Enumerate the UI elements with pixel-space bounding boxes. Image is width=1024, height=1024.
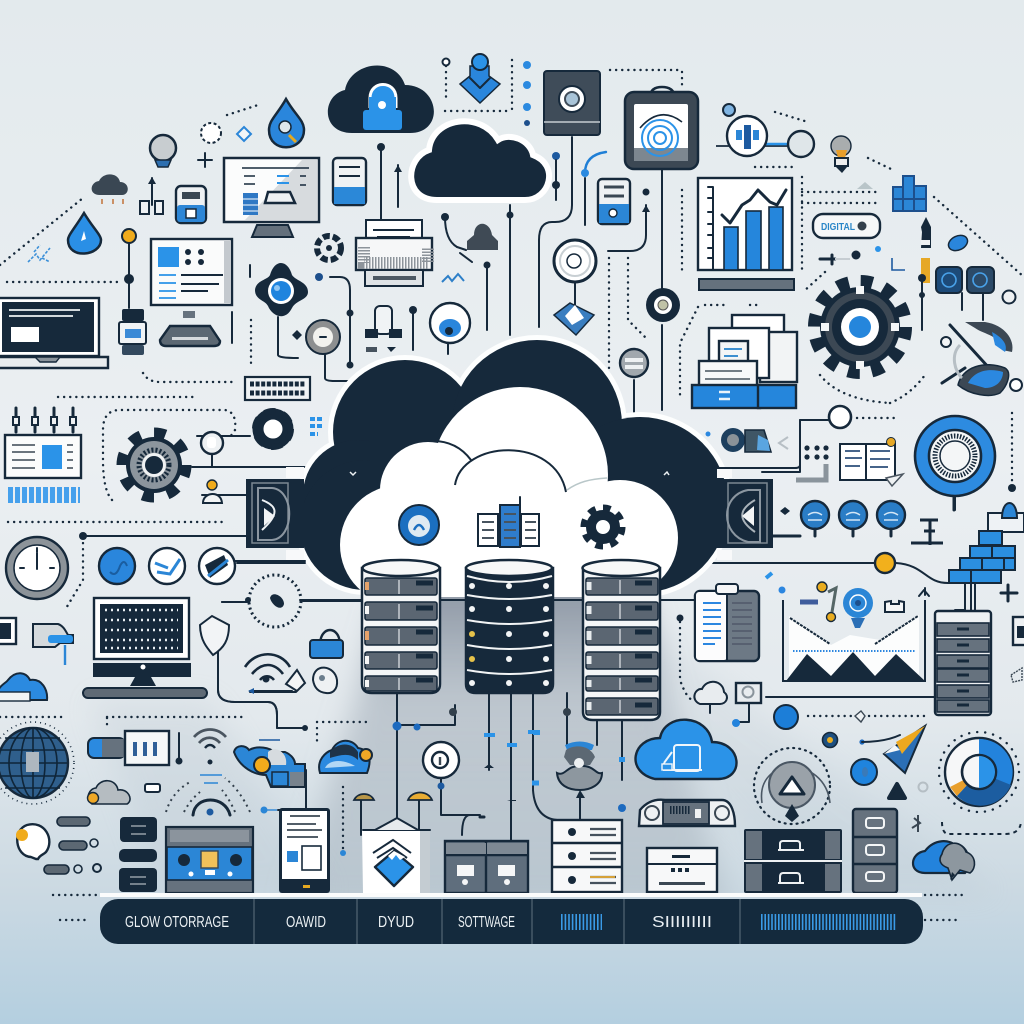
icon: globe	[0, 722, 74, 804]
icon: fingerprint clipboard	[625, 87, 698, 169]
icon: apple circle	[430, 303, 470, 354]
dark outer cloud	[300, 340, 728, 593]
icon: small buildings	[893, 176, 926, 211]
white inner cloud	[340, 387, 678, 605]
icon: cloud lock 2	[441, 212, 514, 282]
icon: gear with ring	[122, 433, 186, 497]
icon: blue device	[176, 186, 206, 223]
icon: thermometer pin	[918, 217, 931, 330]
node connector	[315, 273, 354, 368]
icon: open book	[796, 438, 903, 486]
icon: dark cloud	[411, 121, 549, 200]
icon: bluetooth mark	[912, 815, 920, 832]
chart: mountain area	[766, 573, 929, 681]
icon: blue brick steps	[949, 503, 1024, 583]
icon: small server box	[333, 158, 366, 205]
icon: blue machine	[166, 827, 253, 893]
icon: document book	[695, 584, 759, 661]
icon: pill circle	[620, 349, 648, 377]
icon: white rack	[647, 848, 717, 892]
icon: dotted route	[676, 614, 692, 700]
icon: wifi 2	[194, 730, 226, 764]
icon: storm cloud	[913, 841, 975, 880]
icon: warning triangle	[889, 782, 928, 798]
server stack: middle	[466, 560, 553, 693]
icon: tools circle	[199, 548, 305, 584]
icon: target arcs	[754, 748, 830, 824]
icon: desktop grid monitor	[83, 598, 207, 698]
icon: tape machine	[639, 800, 735, 826]
icon: white server unit	[552, 820, 622, 892]
dashed bracket	[942, 822, 1021, 834]
icon: gear	[584, 508, 622, 546]
dotted panel route	[103, 410, 235, 500]
icon: router panel	[5, 408, 81, 495]
main cloud	[295, 335, 733, 605]
icon: blue circle	[851, 759, 877, 785]
icon: small rain cloud	[92, 174, 128, 204]
icon: paper plane	[859, 726, 925, 773]
node: yellow junction	[875, 553, 895, 573]
icon: tap device	[33, 624, 73, 665]
icon: square camera	[732, 683, 761, 727]
node	[79, 532, 87, 540]
label: cloud: OAWID	[286, 914, 326, 931]
icon: satellite dish	[941, 322, 1022, 395]
icon: buildings	[478, 497, 539, 547]
icon: light bulb	[150, 135, 176, 167]
icon: eye cloud	[255, 263, 308, 316]
icon: cloud with lock	[328, 66, 434, 133]
icon: cloud outline small	[694, 682, 727, 713]
icon: large gear	[815, 282, 905, 372]
icon: USB stick	[88, 731, 182, 765]
small ring	[1002, 290, 1016, 304]
icon: gear ring	[317, 236, 341, 260]
icon: wifi	[245, 654, 305, 694]
tick bars 1	[561, 914, 602, 930]
icon: small server 2	[598, 179, 630, 224]
icon: building blocks with arrow	[140, 177, 163, 214]
icon: left small box	[0, 618, 16, 644]
icon: blue location shield	[460, 54, 500, 103]
icon: chat bubble	[16, 824, 49, 859]
connector pair	[965, 583, 975, 611]
icon: shield	[200, 616, 308, 731]
icon: network sketch	[28, 245, 50, 262]
chart: bars	[698, 178, 794, 290]
label: tick text: SIIIIIIIII	[652, 914, 712, 931]
icon: printer	[356, 220, 432, 286]
icon: cloud small with sun	[88, 781, 160, 804]
icon: diamond	[237, 127, 251, 141]
icon: keyhole circle	[423, 742, 459, 790]
icon: padlock blue	[310, 630, 343, 658]
icon: dotted dial	[222, 575, 362, 627]
icon: ear shape	[313, 668, 337, 693]
tick bars 2	[761, 914, 896, 930]
icon: filing cabinet	[853, 809, 897, 893]
icon: small cog node	[713, 406, 851, 468]
icon: web panel	[151, 239, 232, 318]
icon: infinity circle	[99, 548, 135, 584]
icon: lens dog figure	[557, 742, 602, 798]
icon: binocular camera	[706, 428, 788, 452]
icon: water drop	[269, 99, 304, 147]
label: dyud: DYUD	[378, 914, 414, 931]
icon: camera box	[544, 71, 600, 135]
server stack: left	[362, 560, 440, 693]
icon: check circle	[149, 548, 185, 584]
icon: user	[203, 480, 222, 503]
icon: dark rounded tiles	[119, 817, 157, 892]
icon: sparkle	[198, 153, 212, 167]
icon: watch device	[119, 309, 146, 355]
icon: cloud with orange dot	[319, 741, 372, 773]
icon: digital pill	[813, 214, 880, 238]
icon: keyboard	[245, 377, 310, 400]
bottom label bar	[100, 899, 923, 944]
icon: shield card	[362, 818, 430, 893]
node: yellow pin	[122, 229, 136, 284]
icon: mini gauges circle	[554, 240, 596, 305]
plus sign	[1001, 585, 1017, 601]
icon: folder stack	[692, 315, 797, 408]
icon: digital pill: DIGITAL	[821, 222, 855, 233]
icon: desktop monitor	[224, 158, 319, 237]
icon: tower cabinet	[935, 611, 991, 715]
label: glow storage: GLOW OTORRAGE	[125, 914, 229, 931]
icon: dark gadget	[160, 326, 220, 346]
icon: target	[399, 505, 439, 545]
icon: water drop 2	[68, 213, 101, 254]
icon: right edge small box	[1011, 617, 1024, 682]
icon: light bulb 2	[831, 136, 851, 173]
icon: access person	[365, 306, 417, 352]
icon: cabinet pair	[445, 841, 528, 893]
icon: blue cloud large	[636, 720, 737, 779]
icon: dark drawers	[744, 829, 842, 893]
icon: radar arcs	[166, 775, 277, 816]
small nodes: blue pins	[523, 61, 606, 225]
small controls near gear	[820, 246, 905, 270]
icon: lens circle	[201, 432, 223, 454]
left side connector D block	[246, 467, 304, 560]
right side connector block	[716, 467, 773, 560]
icon: gauge	[6, 537, 68, 599]
icon: pills row	[44, 817, 101, 874]
icon: small yellow node	[822, 732, 838, 748]
label: software: SOTTWAGE	[458, 914, 515, 931]
icon: laptop	[0, 298, 108, 368]
icon: blue dots	[310, 419, 322, 434]
icon: blue node	[774, 705, 925, 729]
small bus nodes	[392, 708, 626, 817]
icon: cloud blocks with orange dot	[234, 740, 306, 803]
icon: knob	[292, 320, 340, 354]
server stack: right	[582, 560, 660, 720]
icon: black gear	[255, 411, 291, 447]
decorative ticks	[350, 472, 669, 475]
icon: blue ring	[915, 416, 995, 510]
icon: dotted gear ring	[201, 123, 221, 143]
white halo of dark cloud	[295, 335, 733, 598]
icon: tablet document	[279, 808, 330, 893]
icon: team circle	[716, 104, 814, 157]
icon: ring node	[646, 288, 680, 322]
icons: small umbrellas	[354, 792, 432, 800]
icon: stacked glyph	[911, 520, 943, 545]
icon: blue oval	[946, 232, 970, 254]
white shelf line	[100, 893, 922, 897]
chart: pie ring	[939, 732, 1019, 812]
triangle marker	[857, 182, 873, 189]
icon: three blue pins	[773, 501, 905, 536]
icon: blue cloud left	[0, 673, 47, 701]
icon: gem	[554, 303, 594, 335]
icon: twin app tiles	[936, 267, 994, 293]
